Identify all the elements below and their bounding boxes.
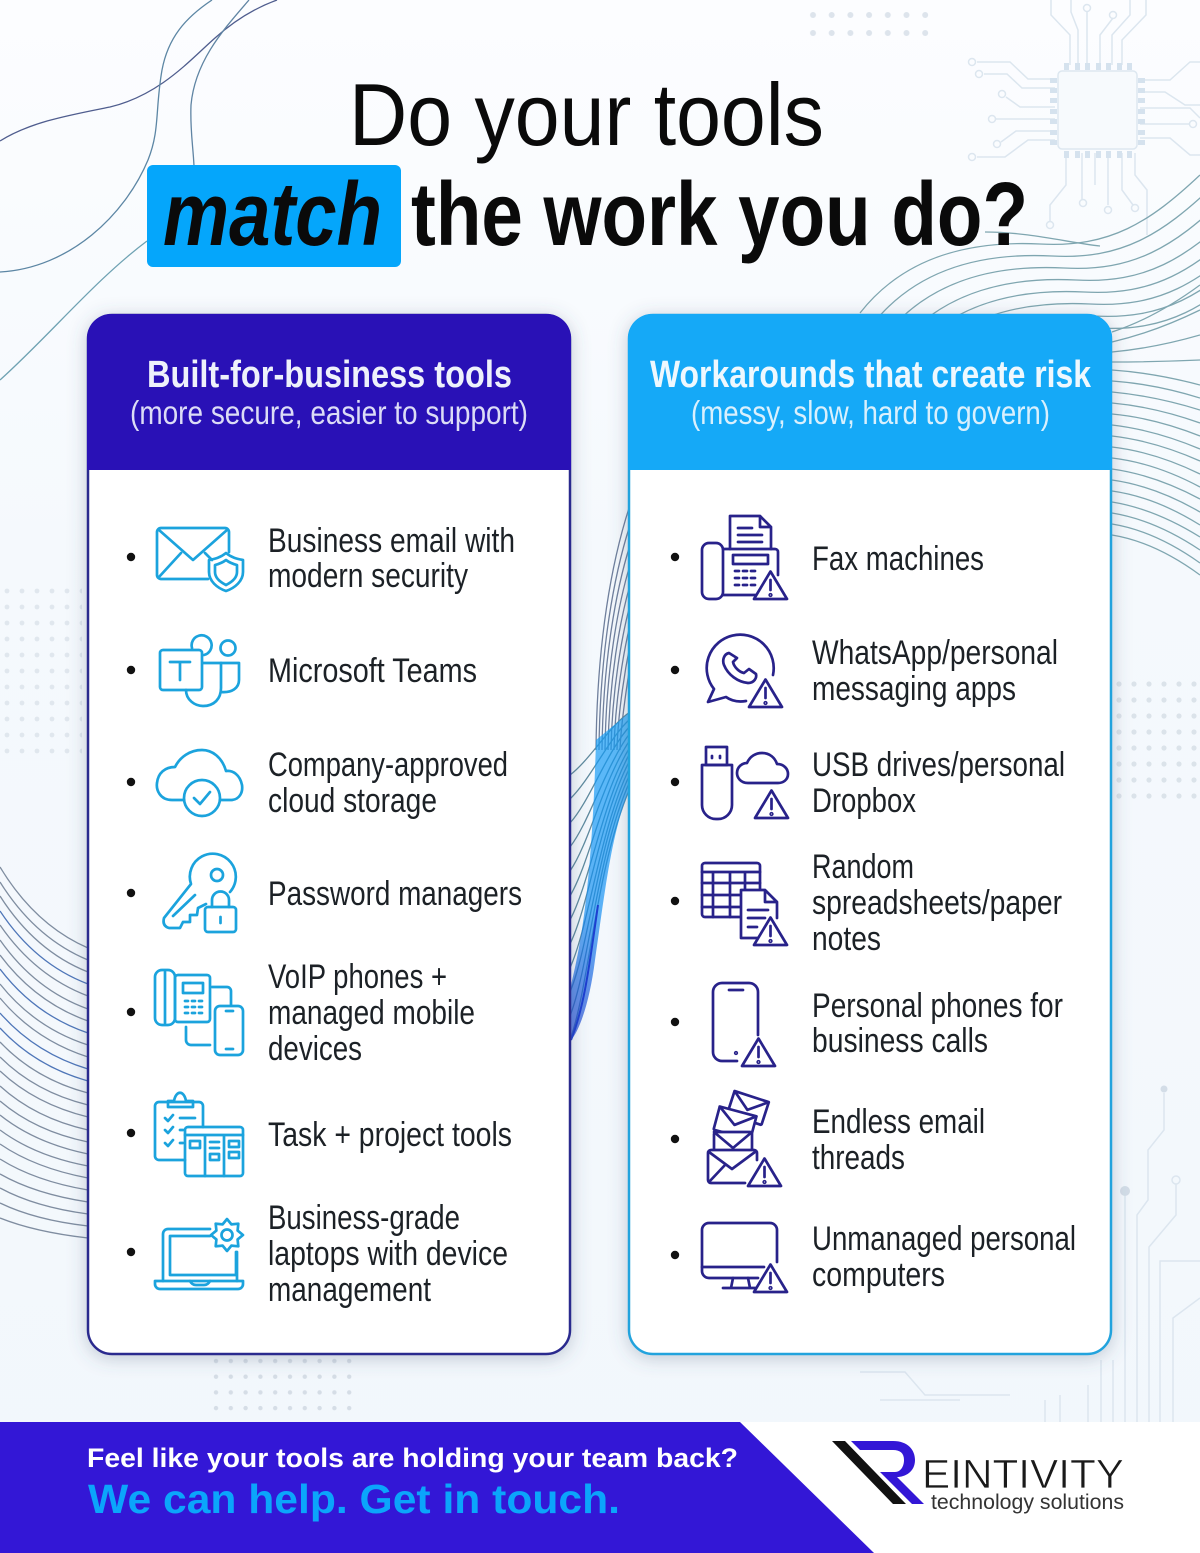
label: threads (812, 1139, 905, 1177)
item: cloud storage (127, 746, 508, 820)
icon: fax machine with warning (702, 516, 787, 599)
icon: chat bubble with warning (707, 635, 782, 707)
call to action: We can help. Get in touch. (88, 1476, 620, 1522)
item: unmanaged computers (671, 1220, 1076, 1294)
panel: workarounds that create risk (628, 314, 1112, 1354)
highlight box (147, 165, 401, 267)
call to action question: Feel like your tools are holding your team back? (87, 1443, 738, 1473)
background: wave lines between panels (570, 505, 630, 1040)
icon: laptop with gear (155, 1219, 243, 1289)
header title: Built-for-business tools (147, 354, 512, 396)
icon: envelope with shield (157, 528, 243, 591)
label: Dropbox (812, 782, 916, 820)
panel header (628, 314, 1112, 470)
label: Business email with (268, 522, 515, 560)
background: wave lines left (0, 867, 88, 1238)
label: managed mobile (268, 994, 475, 1032)
label: business calls (812, 1022, 988, 1060)
logo: EINTIVITY (922, 1451, 1124, 1497)
label (268, 958, 475, 1068)
label (268, 746, 508, 820)
label: Personal phones for (812, 987, 1063, 1025)
footer (0, 1422, 1200, 1553)
label (268, 1199, 508, 1309)
label: laptops with device (268, 1235, 508, 1273)
label: Endless email (812, 1103, 985, 1141)
label: Random (812, 848, 914, 886)
label: modern security (268, 557, 468, 595)
icon: desktop monitor with warning (702, 1223, 787, 1292)
label: USB drives/personal (812, 746, 1065, 784)
icon: stacked envelopes with warning (708, 1091, 781, 1186)
panel header (87, 314, 571, 470)
label: notes (812, 920, 881, 958)
item: task and project tools (127, 1093, 512, 1176)
icon: key and lock (164, 854, 236, 932)
icon: desk phone and mobile (155, 970, 243, 1055)
item: business laptops (127, 1199, 508, 1309)
label: devices (268, 1030, 362, 1068)
item: endless email threads (671, 1091, 985, 1186)
label: messaging apps (812, 670, 1016, 708)
label: computers (812, 1256, 945, 1294)
label (812, 746, 1065, 820)
label: Unmanaged personal (812, 1220, 1076, 1258)
icon: spreadsheet and document with warning (702, 863, 787, 945)
item: USB drives (671, 746, 1065, 820)
item: business email (127, 522, 515, 595)
label: cloud storage (268, 782, 437, 820)
label (812, 634, 1058, 708)
icon: smartphone with warning (713, 983, 775, 1066)
label: Fax machines (812, 540, 984, 578)
label: Microsoft Teams (268, 652, 477, 690)
label: WhatsApp/personal (812, 634, 1058, 672)
header subtitle: (more secure, easier to support) (130, 394, 528, 431)
highlighted word: match (163, 165, 382, 265)
item: Microsoft Teams (127, 635, 477, 706)
icon: cloud with check (157, 750, 242, 816)
title line 1: Do your tools (349, 65, 824, 164)
label: management (268, 1271, 431, 1309)
item: personal phones (671, 983, 1063, 1066)
icon: clipboard and board (155, 1093, 243, 1176)
label (812, 987, 1063, 1060)
item: password managers (127, 854, 522, 932)
label: Business-grade (268, 1199, 460, 1237)
header subtitle: (messy, slow, hard to govern) (691, 394, 1050, 431)
icon: USB and cloud with warning (702, 747, 788, 819)
icon: Teams (160, 635, 239, 706)
label (812, 848, 1062, 958)
background: circuit traces bottom right (860, 1086, 1200, 1422)
background: circuit chip top right (968, 0, 1200, 235)
background: wave lines right (860, 175, 1200, 575)
label: Company-approved (268, 746, 508, 784)
item: fax machines (671, 516, 984, 599)
title line 2: the work you do? (411, 165, 1028, 265)
footer banner (0, 1422, 874, 1553)
label (812, 1220, 1076, 1294)
background: thin curves top left (0, 0, 277, 380)
label (812, 1103, 985, 1177)
panel: built-for-business tools (87, 314, 571, 1354)
item: WhatsApp (671, 634, 1058, 708)
item: VoIP phones (127, 958, 475, 1068)
label: Task + project tools (268, 1116, 512, 1154)
header title: Workarounds that create risk (650, 354, 1092, 396)
item: spreadsheets (671, 848, 1062, 958)
label: VoIP phones + (268, 958, 447, 996)
label: Password managers (268, 875, 522, 913)
logo: technology solutions (931, 1491, 1124, 1514)
label (268, 522, 515, 595)
title (147, 65, 1028, 267)
logo (832, 1441, 1124, 1514)
label: spreadsheets/paper (812, 884, 1062, 922)
